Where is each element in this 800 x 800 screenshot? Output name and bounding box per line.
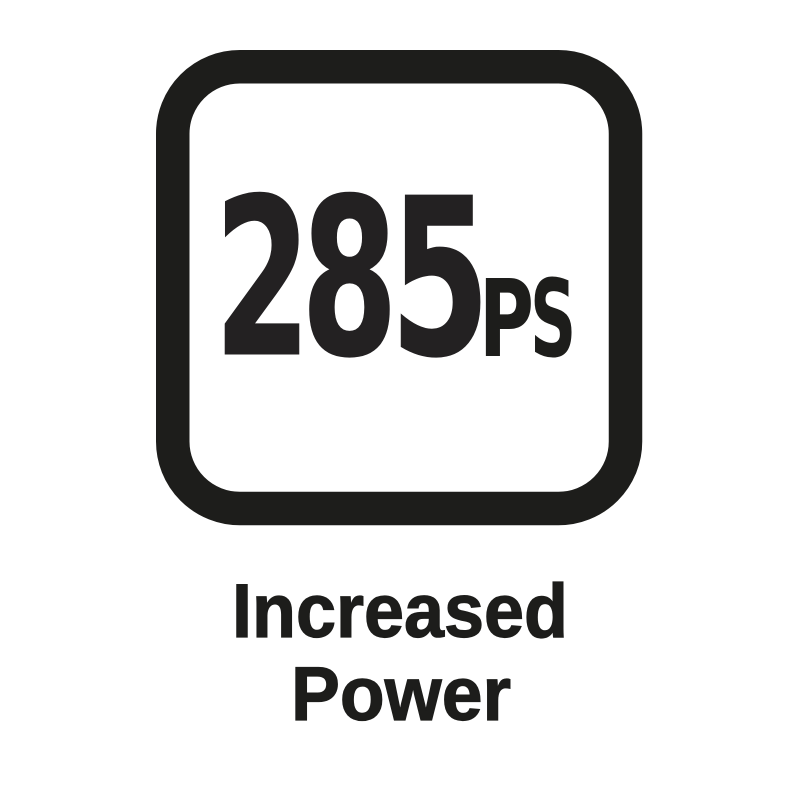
number: 285: 2 <box>214 153 311 406</box>
icon: rounded square frame <box>173 67 626 508</box>
unit: PS: S <box>530 257 576 381</box>
unit: PS <box>479 256 576 381</box>
unit: PS: P <box>479 256 534 381</box>
caption line 1: Increased <box>232 569 568 654</box>
value: 285 PS <box>214 152 576 406</box>
caption: Increased Power <box>232 569 568 737</box>
number: 285 <box>214 152 490 406</box>
number: 285: 5 <box>390 152 490 406</box>
number: 285: 8 <box>301 153 398 406</box>
caption line 2: Power <box>291 652 511 737</box>
